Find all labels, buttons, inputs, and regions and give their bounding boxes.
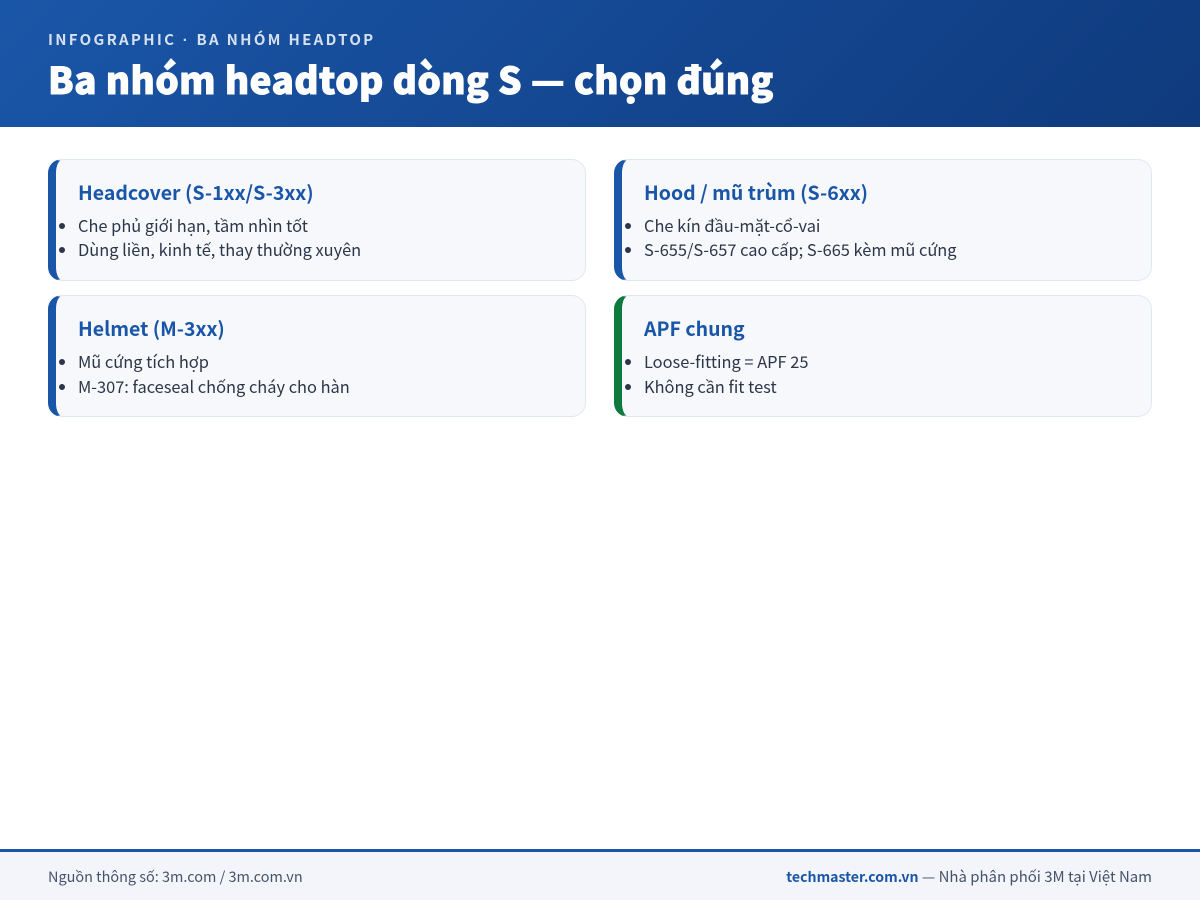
list: APF points: Loose-fitting = APF 25 <box>644 349 808 373</box>
list: Headcover points: Che phủ giới hạn, tầm nhìn tốt <box>78 213 308 237</box>
panel: Hood <box>614 159 1152 281</box>
heading: Headcover: Headcover (S-1xx/S-3xx) <box>78 177 314 206</box>
list: Headcover points <box>59 213 361 261</box>
list: APF points <box>625 349 808 398</box>
list: Helmet points <box>59 349 350 398</box>
header banner <box>0 0 1200 127</box>
heading: Hood: Hood / mũ trùm (S-6xx) <box>644 177 868 206</box>
panel: Helmet <box>48 295 586 417</box>
list: Helmet points: Mũ cứng tích hợp <box>78 349 209 373</box>
list: APF points: Không cần fit test <box>644 374 777 398</box>
footer source: Nguồn thông số: 3m.com / 3m.com.vn <box>48 866 303 887</box>
heading: Helmet: Helmet (M-3xx) <box>78 313 225 342</box>
list: Hood points <box>625 213 957 261</box>
eyebrow label: INFOGRAPHIC · BA NHÓM HEADTOP <box>48 29 375 50</box>
list: Hood points: Che kín đầu-mặt-cổ-vai <box>644 213 820 237</box>
heading: APF chung: APF chung <box>644 313 745 342</box>
footer distributor: techmaster.com.vn — Nhà phân phối 3M tại Việt Nam <box>786 866 1152 887</box>
panel: Headcover <box>48 159 586 281</box>
list: Headcover points: Dùng liền, kinh tế, thay thường xuyên <box>78 237 361 261</box>
list: Hood points: S-655/S-657 cao cấp; S-665 kèm mũ cứng <box>644 237 957 261</box>
panel: APF chung <box>614 295 1152 417</box>
footer <box>0 849 1200 900</box>
list: Helmet points: M-307: faceseal chống cháy cho hàn <box>78 374 350 398</box>
title: Ba nhóm headtop dòng S — chọn đúng <box>48 51 774 105</box>
